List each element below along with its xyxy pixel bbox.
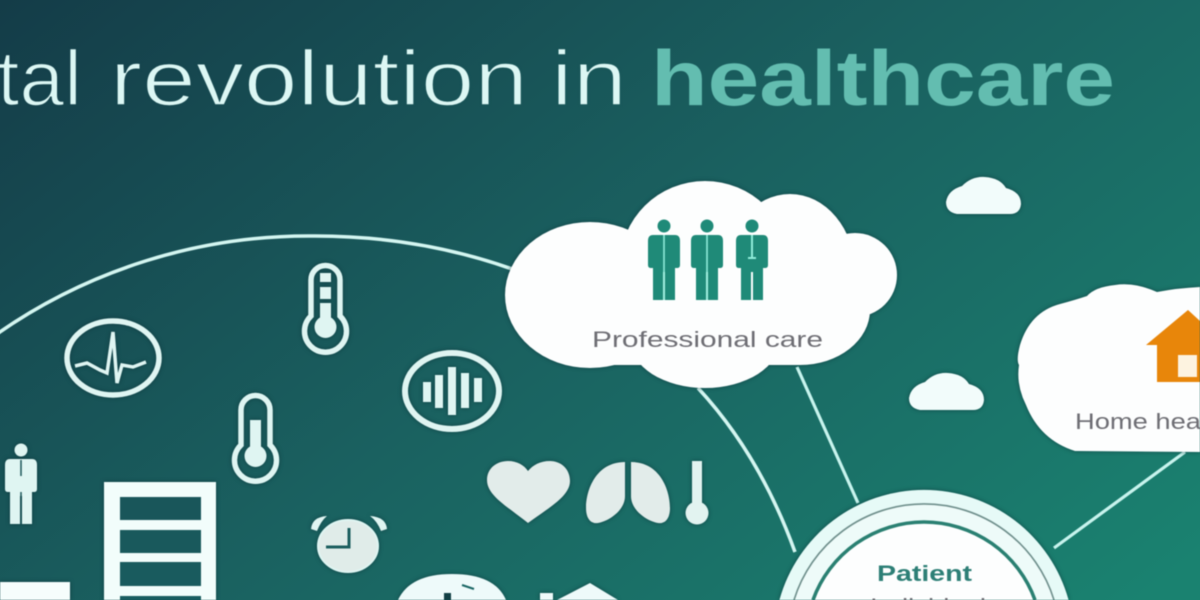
icon: small person	[5, 444, 37, 524]
icon: orange house	[1146, 310, 1200, 382]
connector arc: network boundary	[0, 236, 795, 552]
icon: tall building	[104, 482, 216, 600]
panel: patient circle	[779, 490, 1069, 600]
icon: sound wave oval	[405, 353, 499, 429]
icon: lungs	[586, 462, 670, 523]
icon: globe	[398, 574, 506, 600]
icon: three professionals	[648, 220, 768, 300]
panel: professional care cloud	[505, 181, 897, 388]
icon: thermometer top	[305, 266, 346, 352]
cloud shape	[1018, 284, 1200, 452]
icon: heart	[487, 461, 570, 523]
title	[0, 34, 1115, 122]
icon: slim thermometer	[686, 461, 708, 524]
label: home healthcare: Home hea	[1075, 409, 1200, 434]
small cloud middle	[909, 373, 984, 410]
title: word revolution: revolution	[110, 34, 528, 122]
panel: home healthcare cloud	[1018, 284, 1200, 452]
small cloud top right	[946, 177, 1021, 214]
connector lines to patient	[797, 367, 1185, 548]
icon: thermometer lower	[235, 396, 276, 481]
title: bold part: healthcare	[651, 34, 1115, 122]
icon: bottom house	[540, 583, 618, 600]
label: professional care: Professional care	[592, 327, 823, 352]
icon: low building	[0, 582, 70, 600]
icon: ECG monitor	[67, 321, 159, 395]
cloud shape	[505, 181, 897, 388]
icon: alarm clock	[311, 516, 387, 572]
title: word in: in	[551, 34, 627, 122]
label: patient: Patient	[877, 561, 973, 586]
